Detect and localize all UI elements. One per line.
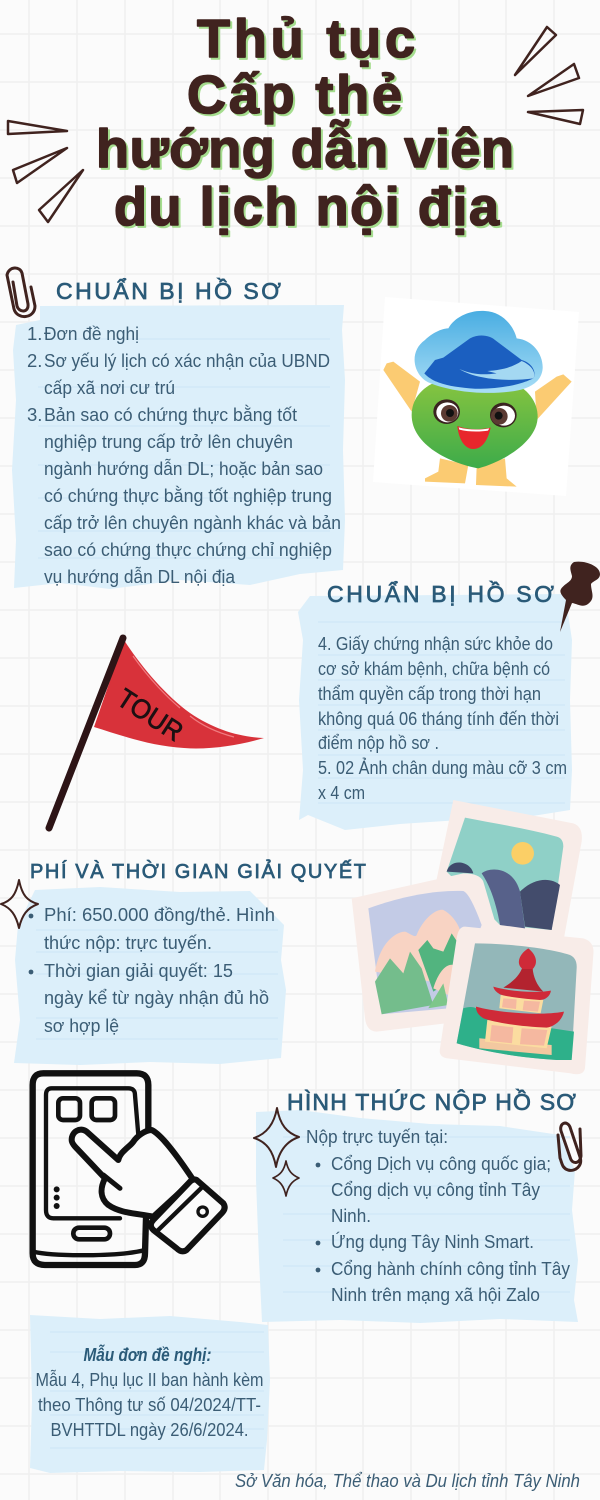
text: submission channels: Cổng Dịch vụ công quốc gia; — [331, 1153, 551, 1174]
mascot — [383, 311, 572, 487]
text: document list: sao có chứng thực chứng chỉ nghiệp — [44, 539, 332, 560]
text: submission channels: Nộp trực tuyến tại: — [306, 1126, 448, 1147]
text: document list: vụ hướng dẫn DL nội địa — [44, 566, 236, 587]
icon: left title accent marks — [8, 121, 83, 222]
text: fee and time: thức nộp: trực tuyến. — [44, 932, 212, 953]
text: document list: 3. — [27, 404, 42, 425]
text: document list: Đơn đề nghị — [44, 323, 139, 344]
text: document list: cấp trở lên chuyên ngành khác và bản — [44, 512, 341, 533]
panel: application form — [30, 1315, 270, 1473]
text: document items 4 and 5: điểm nộp hồ sơ . — [318, 732, 439, 753]
text: document list: cấp xã nơi cư trú — [44, 377, 175, 398]
photo: pagoda — [440, 927, 594, 1074]
icon: small sparkle — [273, 1161, 299, 1196]
illustration: photo stack — [352, 800, 594, 1074]
text: document list: 1. — [27, 323, 42, 344]
text: application form note: Mẫu 4, Phụ lục II ban hành kèm — [36, 1369, 264, 1390]
text: submission channels — [306, 1126, 571, 1305]
text: fee and time: Phí: 650.000 đồng/thẻ. Hình — [44, 904, 275, 925]
title — [96, 9, 514, 237]
icon: right title accent marks — [515, 27, 583, 124]
text: document list: 2. — [27, 350, 42, 371]
text: document items 4 and 5: 5. 02 Ảnh chân dung màu cỡ 3 cm — [318, 757, 567, 778]
text: application form note: BVHTTDL ngày 26/6/2024. — [50, 1419, 248, 1440]
text: fee and time — [29, 904, 275, 1036]
text: document items 4 and 5: 4. Giấy chứng nhận sức khỏe do — [318, 633, 553, 654]
icon: push pin — [560, 562, 600, 632]
heading: fee and processing time: PHÍ VÀ THỜI GIAN GIẢI QUYẾT — [30, 860, 366, 883]
text: submission channels: Ninh trên mạng xã hội Zalo — [331, 1284, 540, 1305]
text: submission channels: Ninh. — [331, 1205, 371, 1226]
text: application form note: Mẫu đơn đề nghị: — [84, 1344, 212, 1365]
title: hướng dẫn viên — [96, 119, 514, 179]
icon: paperclip top left — [7, 268, 35, 317]
heading: submission method: HÌNH THỨC NỘP HỒ SƠ — [287, 1088, 576, 1115]
text: document list: Bản sao có chứng thực bằng tốt — [44, 404, 297, 425]
text: submission channels: Cổng dịch vụ công tỉnh Tây — [331, 1179, 541, 1200]
title: Thủ tục — [197, 9, 415, 69]
panel: submission method — [256, 1110, 578, 1323]
text: document items 4 and 5: cơ sở khám bệnh, chữa bệnh có — [318, 658, 550, 679]
photo: mountains and sun — [433, 800, 582, 948]
text: application form note: theo Thông tư số 04/2024/TT- — [38, 1394, 261, 1415]
text: document items 4 and 5 — [318, 633, 567, 803]
photo: peaks — [352, 873, 500, 1032]
heading: preparing documents 2: CHUẨN BỊ HỒ SƠ — [327, 580, 554, 607]
flag label: TOUR — [112, 683, 188, 747]
text: document list: Sơ yếu lý lịch có xác nhận của UBND — [44, 350, 330, 371]
text: document items 4 and 5: không quá 06 tháng tính đến thời — [318, 708, 559, 729]
text: fee and time: sơ hợp lệ — [44, 1015, 119, 1036]
illustration: mascot card — [373, 297, 579, 496]
heading: preparing documents 1: CHUẨN BỊ HỒ SƠ — [56, 277, 281, 304]
illustration: tour flag — [49, 638, 264, 828]
panel: preparing documents part 2 — [298, 594, 572, 830]
text: fee and time: Thời gian giải quyết: 15 — [44, 960, 233, 981]
text: document list: có chứng thực bằng tốt nghiệp trung — [44, 485, 332, 506]
text: submission channels: Ứng dụng Tây Ninh Smart. — [331, 1231, 534, 1252]
text: document list — [27, 323, 341, 587]
icon: large sparkle — [254, 1108, 299, 1167]
text: document items 4 and 5: thẩm quyền cấp trong thời hạn — [318, 683, 541, 704]
icon: sparkle — [1, 880, 38, 928]
text: document list: ngành hướng dẫn DL; hoặc bản sao — [44, 458, 323, 479]
title: Cấp thẻ — [187, 65, 402, 125]
title: du lịch nội địa — [114, 177, 500, 237]
panel: fee and processing time — [14, 887, 286, 1065]
text: document list: nghiệp trung cấp trở lên chuyên — [44, 431, 293, 452]
icon: phone with tapping hand — [33, 1073, 225, 1265]
icon: paperclip right — [558, 1123, 581, 1170]
text: fee and time: ngày kể từ ngày nhận đủ hồ — [44, 987, 269, 1008]
text: document items 4 and 5: x 4 cm — [318, 782, 365, 803]
panel: preparing documents part 1 — [12, 305, 345, 589]
text: submission channels: Cổng hành chính công tỉnh Tây — [331, 1258, 571, 1279]
text: application form note — [36, 1344, 264, 1440]
